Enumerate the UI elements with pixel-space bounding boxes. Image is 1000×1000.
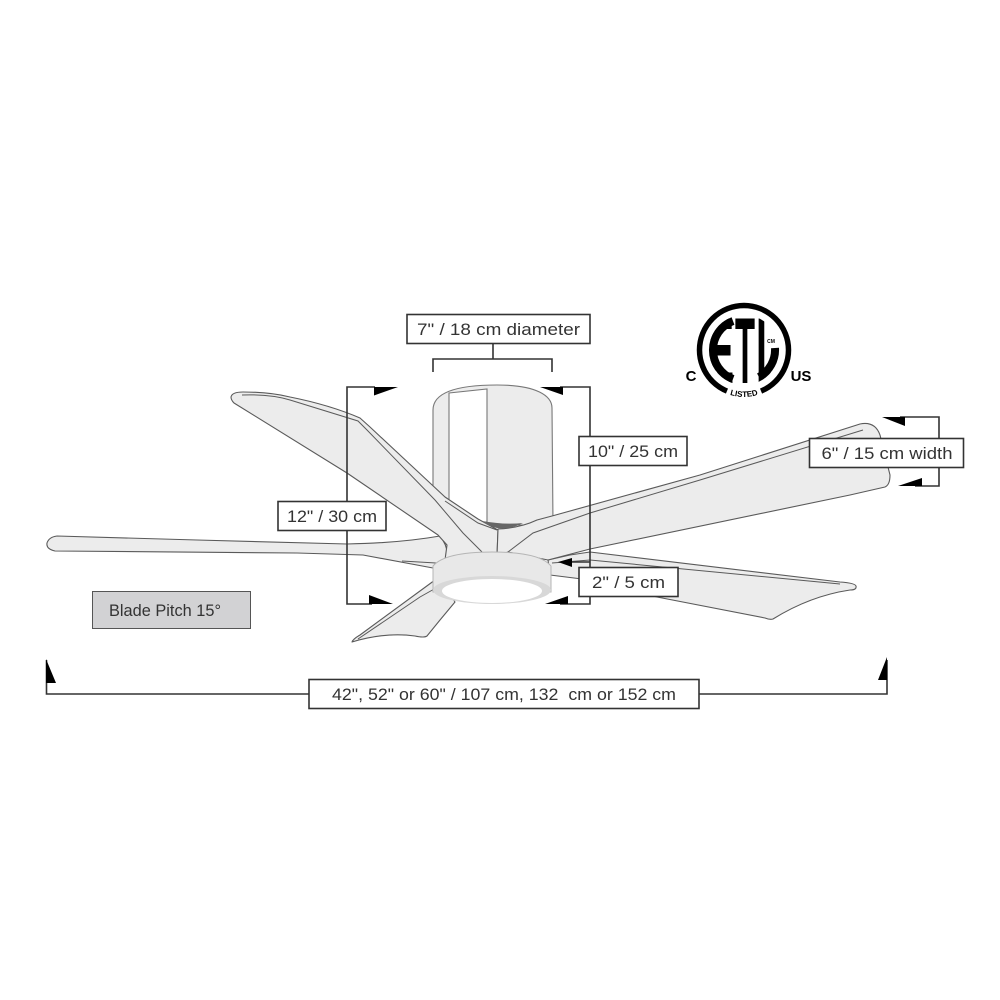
ETL listed logo: CM: [767, 339, 775, 345]
dimension: 6 in blade width: 6" / 15 cm width: [822, 444, 952, 463]
dimension: overall span: 42", 52" or 60" / 107 cm, 132 cm or 152 cm: [332, 685, 676, 704]
dimension: 2 in hub height: 2" / 5 cm: [592, 573, 665, 592]
dimension: 10 in height: 10" / 25 cm: [588, 442, 678, 461]
dimension: 10 in height: [540, 387, 687, 604]
dimension: overall span: [46, 657, 887, 708]
dimension: 7 in diameter: [407, 314, 590, 372]
ETL listed logo: LISTED: [730, 390, 758, 397]
ETL listed logo: T: [735, 298, 755, 403]
blade: lower right: [548, 552, 856, 619]
ETL listed logo: [686, 302, 811, 397]
blade: lower left: [352, 580, 455, 642]
fan motor housing: [433, 385, 553, 525]
blade: left: [47, 536, 447, 568]
dimension: 7 in diameter: 7" / 18 cm diameter: [417, 320, 580, 339]
blade: upper left: [231, 392, 498, 560]
led light: [433, 576, 551, 604]
hub: [433, 552, 551, 604]
ETL listed logo: E: [708, 298, 734, 403]
blade: upper right: [497, 423, 890, 560]
dimension: 12 in height: [278, 387, 398, 604]
dimension: 12 in height: 12" / 30 cm: [287, 507, 377, 526]
blade pitch label: [92, 592, 250, 628]
motor shadow crescent: [482, 521, 523, 528]
ETL listed logo: C: [686, 368, 697, 385]
fan illustration: [47, 385, 890, 642]
ceiling fan dimension diagram: [46, 302, 964, 710]
ETL listed logo: US: [791, 368, 811, 385]
blade pitch label: Blade Pitch 15°: [109, 601, 221, 620]
dimension: 6 in blade width: [810, 417, 964, 486]
dimension: 2 in hub height: [558, 558, 678, 596]
ETL listed logo: L: [756, 298, 780, 403]
